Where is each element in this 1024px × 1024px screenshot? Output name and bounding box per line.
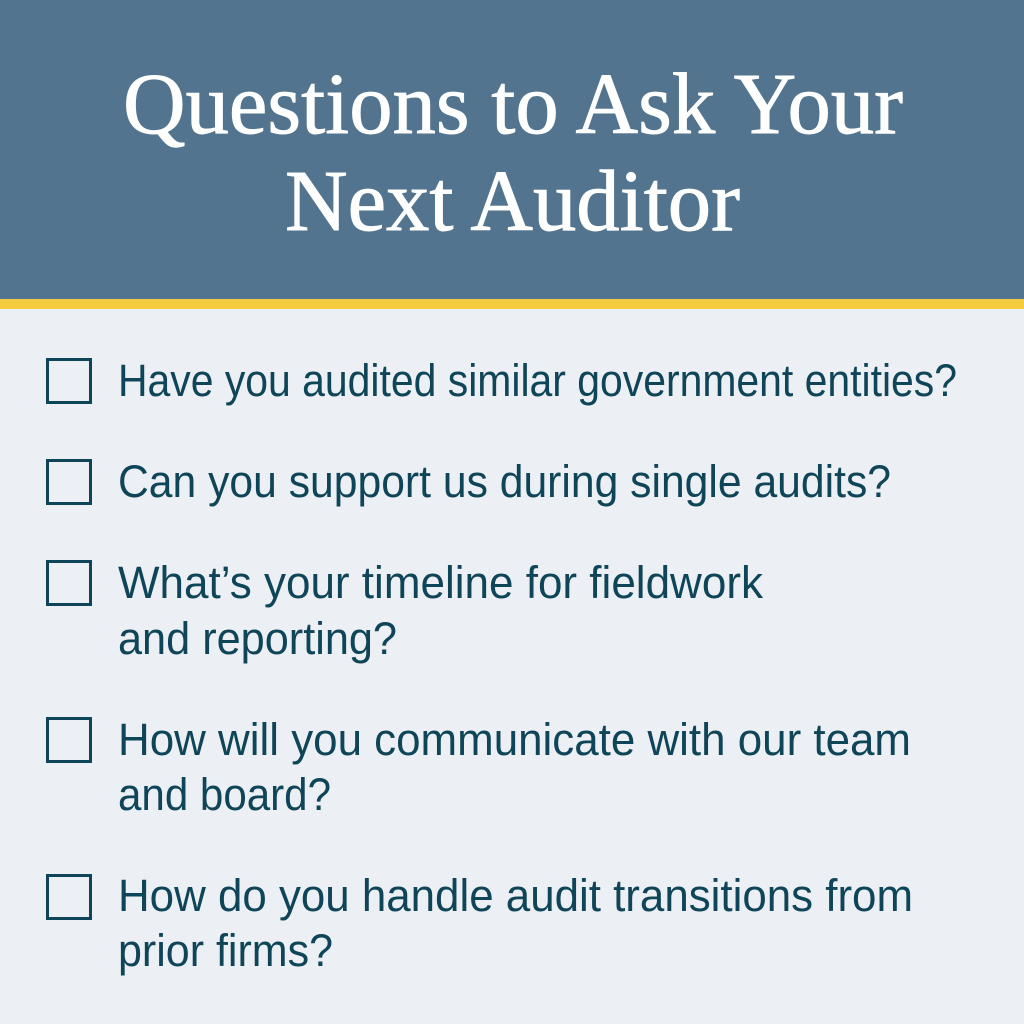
question 3 text: and reporting? [118, 613, 397, 664]
question 2 text: Can you support us during single audits? [118, 456, 891, 507]
checklist item 3 [48, 557, 763, 664]
yellow divider band [0, 299, 1024, 309]
title [123, 55, 903, 249]
icon: checkbox 2 [48, 460, 90, 504]
header banner [0, 0, 1024, 299]
icon: checkbox 4 [48, 718, 90, 762]
question 3 text [118, 557, 763, 664]
icon: checkbox 1 [48, 360, 90, 402]
checklist item 2 [48, 456, 891, 507]
checklist item 4 [48, 714, 911, 820]
question 5 text [118, 870, 913, 976]
question 1 text: Have you audited similar government entities? [118, 355, 957, 406]
question 3 text: What’s your timeline for fieldwork [118, 557, 763, 608]
question 5 text: How do you handle audit transitions from [118, 870, 913, 921]
icon: checkbox 3 [48, 562, 90, 604]
question 5 text: prior firms? [118, 925, 333, 976]
checklist item 1 [48, 355, 957, 406]
title: Questions to Ask Your [123, 55, 903, 152]
checklist item 5 [48, 870, 913, 976]
question 4 text [118, 714, 911, 820]
question 4 text: and board? [118, 769, 331, 820]
question 4 text: How will you communicate with our team [118, 714, 911, 765]
icon: checkbox 5 [48, 876, 90, 918]
title: Next Auditor [285, 152, 740, 249]
